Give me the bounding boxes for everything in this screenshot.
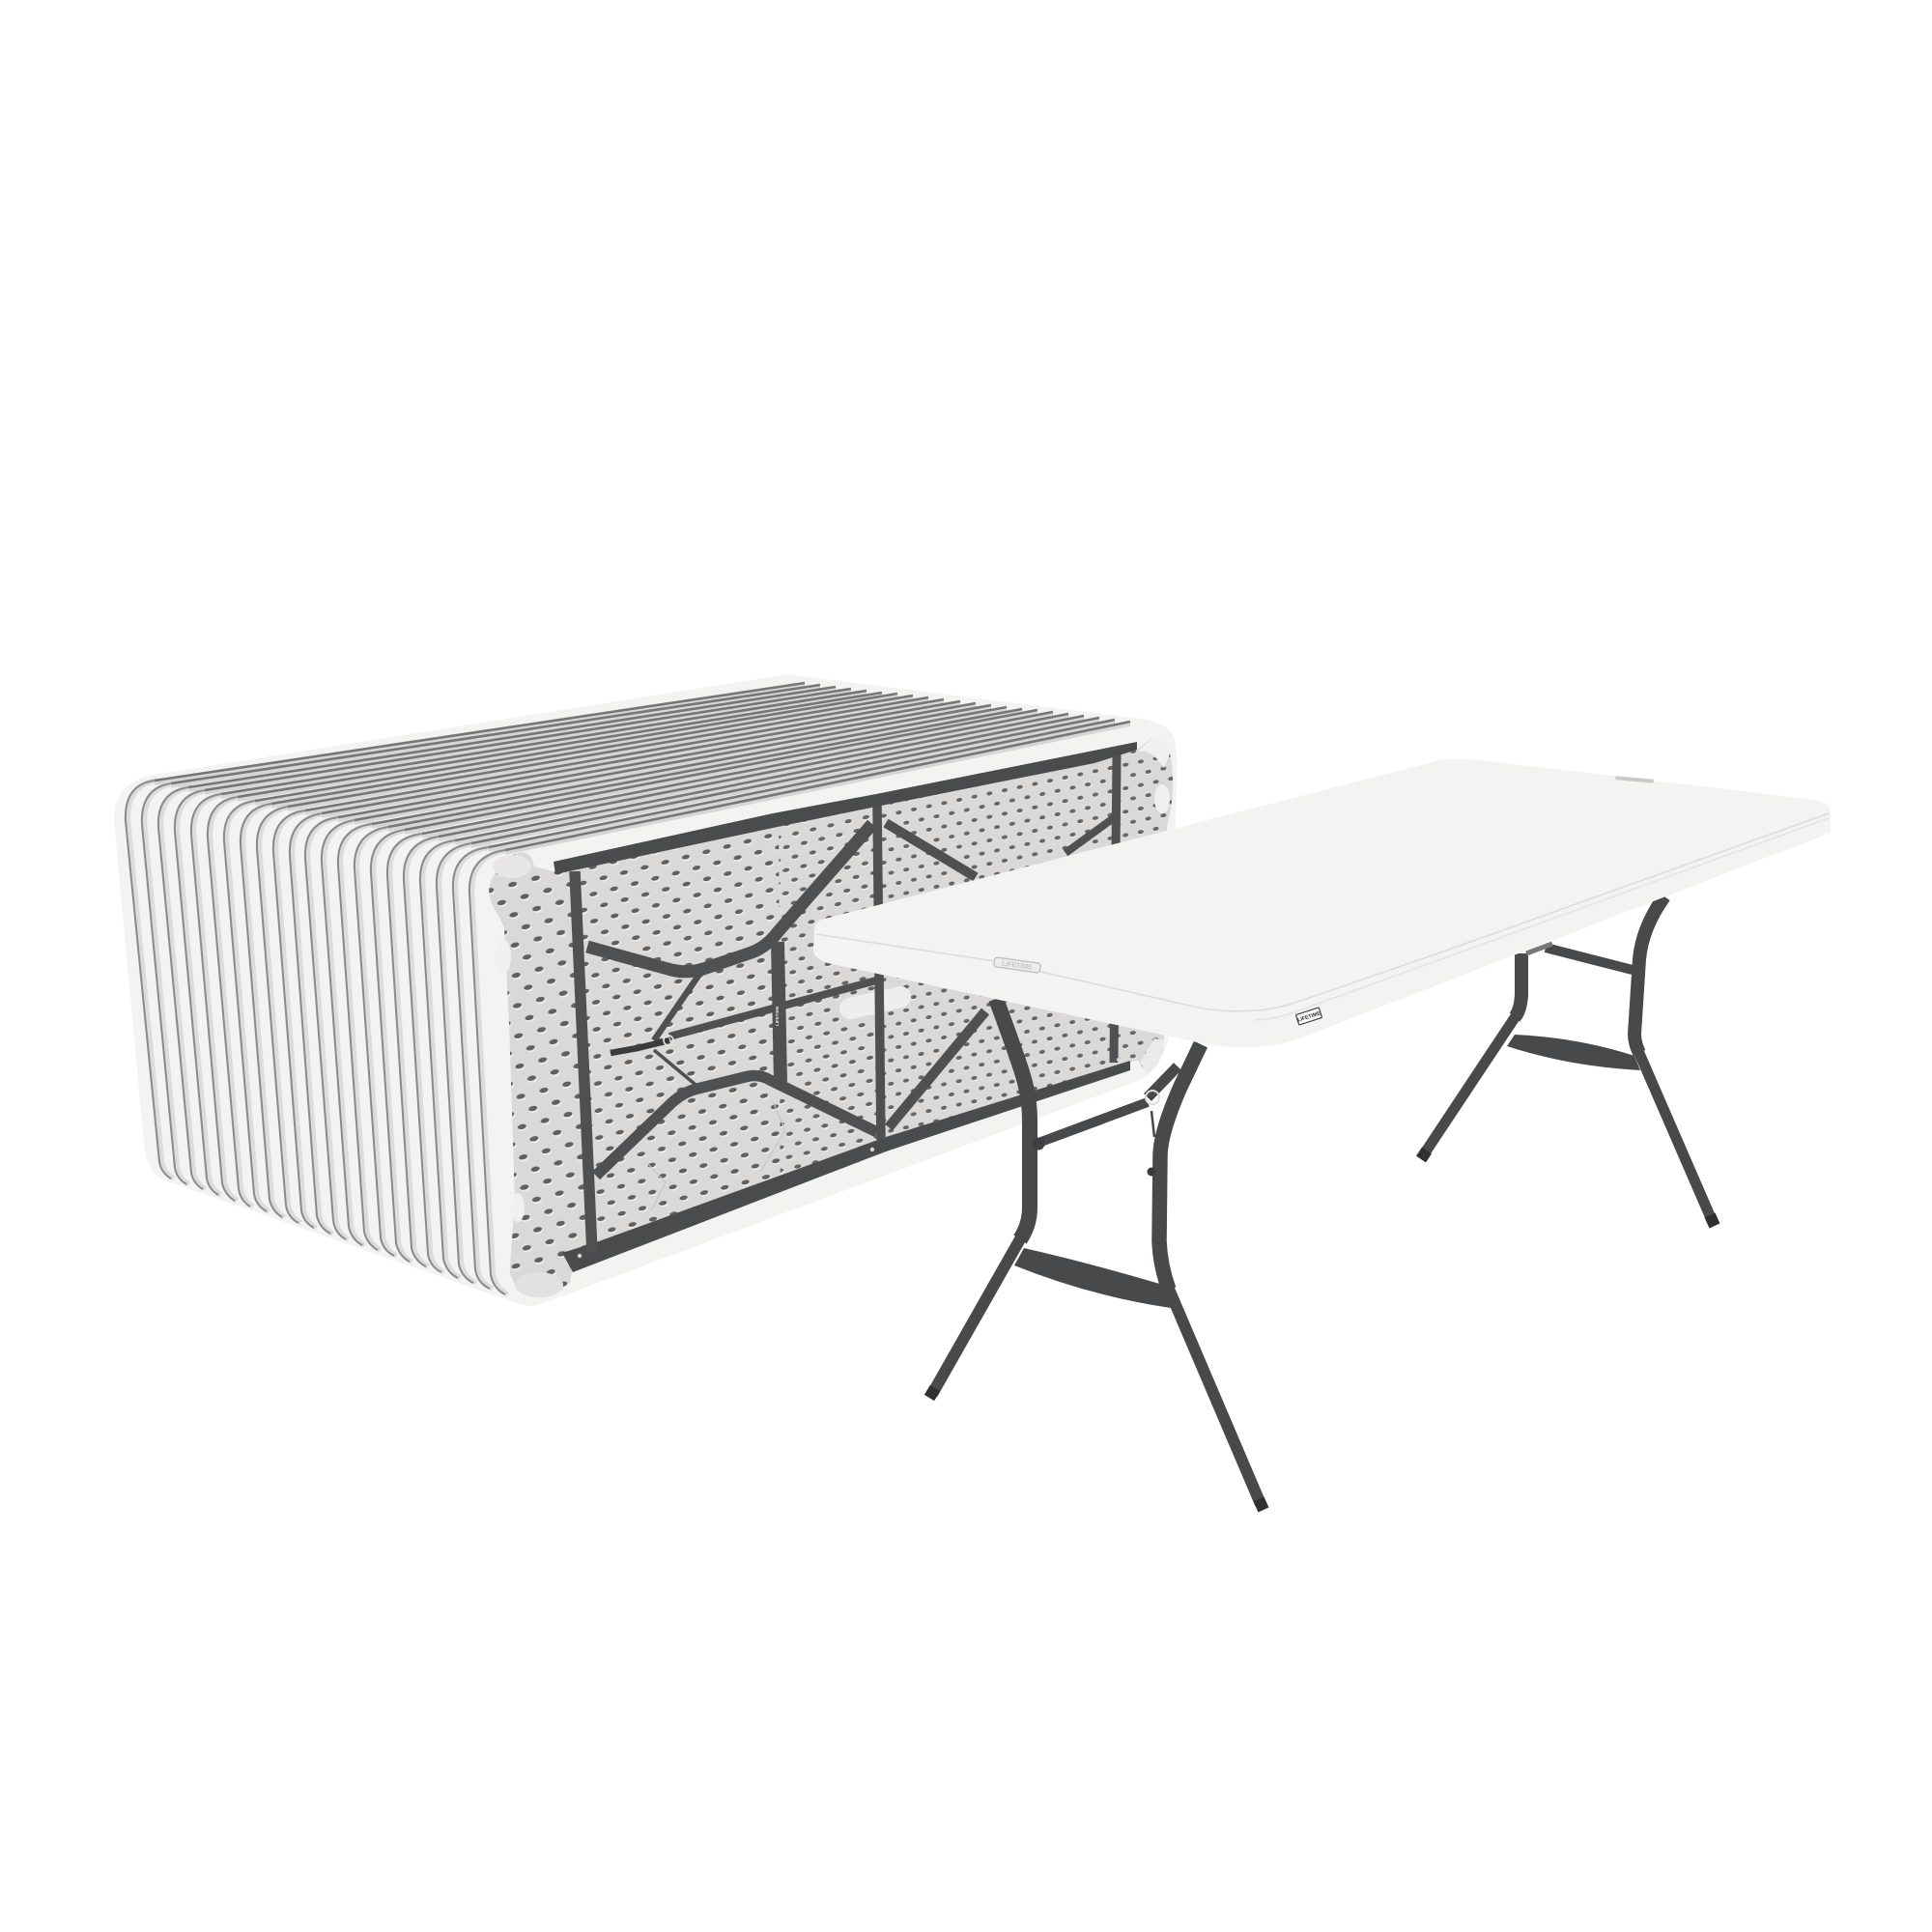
pivot bbox=[1032, 1138, 1045, 1150]
upper bent brace bbox=[587, 824, 872, 972]
rib lines on stacked table edges bbox=[126, 683, 1130, 1294]
right foot-level brace bbox=[1507, 1035, 1640, 1070]
latch stub bbox=[1148, 1167, 1155, 1177]
embossed logo on front edge bbox=[994, 957, 1040, 973]
thin latch rod bbox=[1151, 1111, 1154, 1137]
right vertical bar bbox=[1114, 755, 1117, 1063]
stack silhouette bbox=[114, 674, 1177, 1306]
leg feet bbox=[929, 1151, 1715, 1510]
panel edge bumps and moulded details bbox=[493, 737, 1170, 1297]
open table legs bbox=[929, 896, 1715, 1510]
bottom rail bbox=[562, 1061, 1130, 1272]
illustration: stacked folded tables and open table bbox=[114, 674, 1831, 1513]
logo badge on corner bbox=[1295, 1008, 1322, 1025]
folded table stack bbox=[114, 674, 1179, 1306]
short middle vertical bar bbox=[778, 942, 781, 1082]
left foot-level brace with logo: LIFETIME bbox=[1073, 1271, 1103, 1284]
centre vertical bar bbox=[877, 805, 881, 1140]
right leg frame, rear leg bbox=[1424, 953, 1521, 1154]
open table top bbox=[813, 759, 1831, 1047]
latch piece bbox=[611, 1040, 669, 1053]
left vertical bar bbox=[575, 871, 592, 1253]
perforation dot pattern bbox=[483, 715, 1179, 1304]
horizontal cross bar bbox=[669, 980, 876, 1037]
latch ring bbox=[1146, 1091, 1159, 1104]
right leg frame, front leg bbox=[1634, 896, 1712, 1220]
underside panel of front folded table bbox=[489, 737, 1173, 1297]
table surface bbox=[813, 759, 1831, 1047]
logo badge on corner: LIFETIME bbox=[1297, 1010, 1321, 1024]
embossed logo on far edge bbox=[1615, 776, 1654, 783]
embossed logo on front edge: LIFETIME bbox=[1002, 960, 1033, 972]
left leg frame, front leg bbox=[1159, 1044, 1261, 1504]
right cross bar bbox=[1546, 948, 1633, 970]
diagonal strut bbox=[654, 976, 698, 1040]
top rail bbox=[554, 742, 1137, 874]
right upper diagonal bbox=[886, 823, 976, 877]
steel frame under folded table bbox=[554, 742, 1137, 1272]
left foot-level brace with logo bbox=[1014, 1248, 1171, 1308]
left cross bar bbox=[1038, 1102, 1148, 1143]
lower bent brace bbox=[596, 1076, 877, 1176]
edge groove lines bbox=[816, 813, 1829, 1020]
frame logo: LIFETIME bbox=[775, 1007, 780, 1026]
right lower diagonal bbox=[889, 1011, 985, 1127]
thin lower strut bbox=[654, 1050, 700, 1089]
left latch strut bbox=[1148, 1066, 1178, 1097]
latch ring bbox=[664, 1036, 673, 1045]
right latch bracket bbox=[1526, 944, 1552, 953]
far right diagonal bbox=[1065, 814, 1119, 853]
rivets bbox=[578, 1058, 1121, 1258]
left leg frame, rear leg bbox=[932, 999, 1030, 1394]
